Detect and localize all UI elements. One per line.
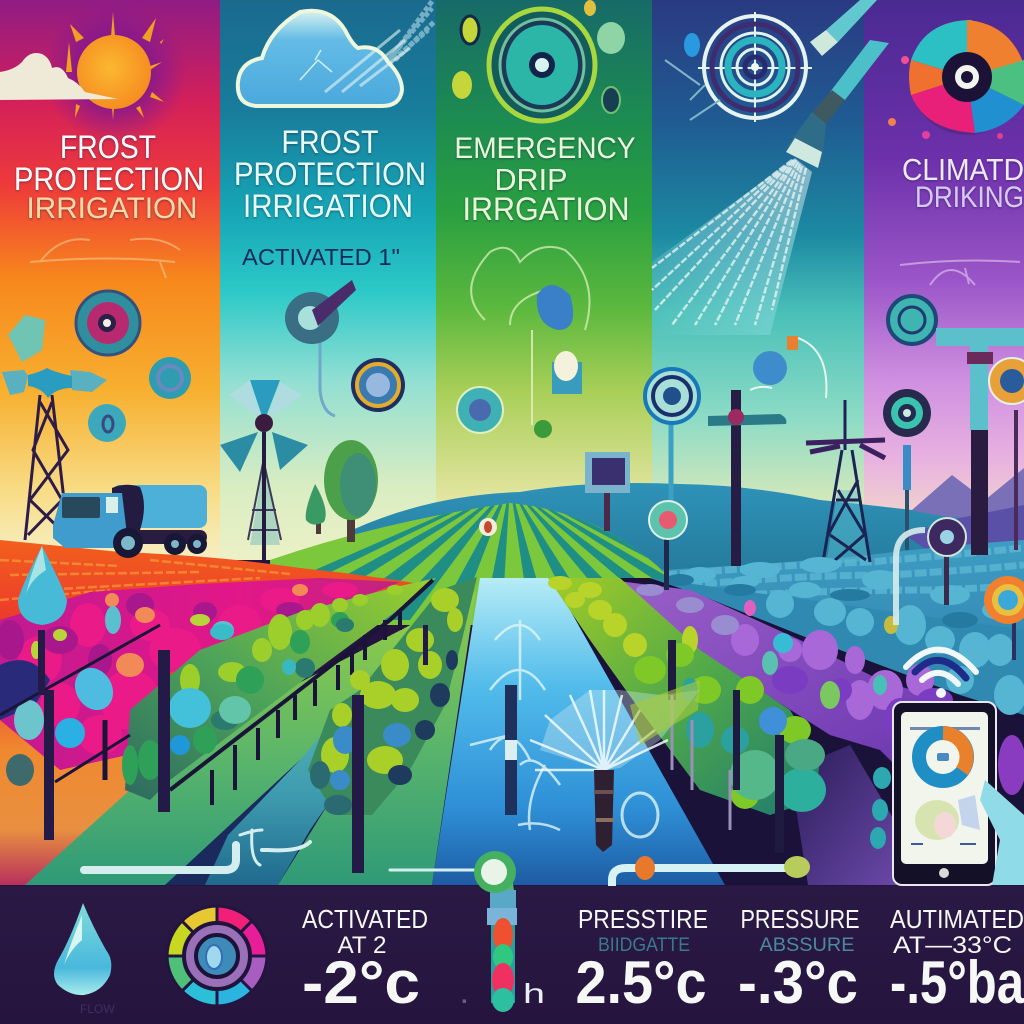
icon: sprinkler post on path <box>505 685 517 815</box>
icon: green ring and traffic-light gauge <box>474 851 517 1012</box>
heading: frost protection irrigation, column 2 <box>234 124 426 224</box>
icon: white blob on blue mesh <box>552 351 582 394</box>
icon: white pipe left <box>84 830 480 870</box>
panel: frost protection column background <box>0 0 220 560</box>
icon: valve column 2 <box>285 280 356 416</box>
stat fragments beside gauge: . <box>461 982 468 1009</box>
caption: flow: FLOW <box>80 1002 115 1016</box>
stat: activated at 2, minus 2 degrees: -2°c <box>302 949 420 1016</box>
icon: leaf gem column 1 <box>8 315 45 362</box>
heading: frost protection irrigation, column 1 <box>14 129 204 225</box>
stat: pressure minus .3: PRESSURE <box>740 904 860 934</box>
icon: smartphone with dashboard <box>893 702 996 885</box>
stat: automated at minus 33, minus .5 bar <box>890 904 1024 1016</box>
icon: segmented colour wheel <box>167 906 267 1006</box>
striped green field <box>270 503 664 625</box>
panel: frost protection irrigation column background <box>220 0 436 560</box>
icon: blue spiral dial column 4 <box>645 369 699 510</box>
ground: green strip 2 <box>278 590 476 885</box>
purple foreground ridge <box>905 505 1024 560</box>
icon: spiral dial column 5 upper <box>888 296 936 344</box>
thin pipe line <box>531 330 533 425</box>
heading: emergency drip irrigation: IRRGATION <box>462 191 630 227</box>
heading: frost protection irrigation, column 1: PROTECTION <box>14 161 204 197</box>
stat: pressure 2.5 <box>576 904 708 1016</box>
ground: right dark soil <box>552 578 1024 885</box>
ground: left soil wedge <box>0 660 300 885</box>
icon: control box <box>585 452 630 531</box>
heading: emergency drip irrigation: DRIP <box>494 162 568 197</box>
ground: dark furrow <box>165 760 335 885</box>
ground: green strip 1 <box>25 620 420 885</box>
icon: cross-arm pole <box>708 390 786 566</box>
stat: pressure minus .3: ABSSURE <box>760 935 854 956</box>
thin curved line <box>750 338 826 398</box>
heading: frost protection irrigation, column 1: IRRIGATION <box>26 192 198 225</box>
icon: white pipe right with balls <box>612 856 810 886</box>
icon: ring dial on field <box>649 501 687 590</box>
heading: emergency drip irrigation: EMERGENCY <box>454 132 636 165</box>
icon: emergency gauge dial <box>452 0 625 121</box>
icon: orange ring dial column 5 <box>989 358 1024 404</box>
faded sketch below column 1 heading <box>30 239 180 278</box>
icon: blue ball <box>753 351 787 385</box>
icon: T pipe column 5 <box>936 328 1024 555</box>
icon: wifi signal <box>906 650 976 698</box>
vineyard: green row near path <box>308 577 477 873</box>
icon: purple sensor dial column 1 <box>76 291 140 355</box>
leaf outlines under heading <box>471 247 590 330</box>
icon: orange small marker <box>787 336 798 350</box>
vineyard: fence rails <box>0 580 433 805</box>
heading: frost protection irrigation, column 2: FROST <box>282 124 378 160</box>
stat: activated at 2, minus 2 degrees: AT 2 <box>338 932 386 959</box>
icon: blue water capsule <box>537 285 573 330</box>
heading: frost protection irrigation, column 2: IRRIGATION <box>243 188 413 224</box>
heading: emergency drip irrigation <box>454 132 636 227</box>
icon: sprinkler with spray <box>530 680 700 852</box>
stat: pressure 2.5: BIIDGATTE <box>598 935 690 956</box>
ground: purple soil <box>790 745 900 885</box>
heading: frost protection irrigation, column 1: FROST <box>60 129 156 165</box>
icon: sun with cloud <box>0 0 187 144</box>
stat fragments beside gauge: h <box>523 978 545 1009</box>
red orange foreground field <box>0 540 420 700</box>
panel: climate driven column background <box>864 0 1024 560</box>
stat: activated at 2, minus 2 degrees: ACTIVATED <box>302 904 428 934</box>
label: activated 1: ACTIVATED 1" <box>242 244 400 270</box>
icon: lattice tower column 4 <box>806 400 885 568</box>
icon: green ball <box>534 420 552 438</box>
heading: frost protection irrigation, column 2: PROTECTION <box>234 156 426 192</box>
stat: activated at 2, minus 2 degrees <box>302 904 428 1016</box>
icon: concentric target <box>665 12 812 122</box>
icon: yellow ring dial column 2 <box>351 358 405 412</box>
teal fingers beside phone <box>870 767 891 849</box>
icon: teal dial column 3 <box>457 387 503 433</box>
background hills <box>352 483 1024 620</box>
icon: colourful pie chart <box>888 19 1024 139</box>
icon: small teal dial column 1 <box>88 404 126 442</box>
vineyard: pink row <box>0 578 400 786</box>
distant mountains <box>900 468 1024 560</box>
icon: small field marker on green field <box>479 518 497 536</box>
vineyard: green row centre left <box>122 578 436 800</box>
vineyard: green row right <box>548 576 826 853</box>
icon: tanker truck <box>53 485 207 558</box>
icon: orange spiral dial on field <box>984 576 1024 660</box>
faded sketch below column 5 heading <box>900 261 1020 285</box>
icon: teal dial column 1 <box>149 357 191 399</box>
blue right field <box>660 540 1024 700</box>
stat: pressure minus .3 <box>738 904 860 1016</box>
icon: hand holding phone <box>980 780 1024 885</box>
icon: dark purple dial on field <box>928 518 966 605</box>
icon: cloud with spray <box>238 0 434 106</box>
icon: small tree <box>306 484 326 534</box>
panel: sprinkler column background <box>652 0 864 560</box>
vineyard: fence posts <box>38 630 170 840</box>
stat: automated at minus 33, minus .5 bar: AT—33°C <box>893 932 1012 959</box>
icon: water drop on field <box>18 546 67 625</box>
ground: teal strip <box>205 580 475 885</box>
vineyard: purple row right <box>610 580 960 775</box>
bottom band <box>0 886 1024 1024</box>
panel: emergency drip column background <box>436 0 652 560</box>
stat fragments beside gauge <box>461 978 545 1009</box>
path: pale irrigation shapes on central path <box>470 620 658 837</box>
icon: bottom water drop <box>54 903 111 995</box>
icon: hose nozzle with water spray <box>652 0 889 335</box>
leaf: purple swirl right of phone <box>998 735 1024 795</box>
stat: pressure 2.5: PRESSTIRE <box>578 904 708 934</box>
icon: tower with pipe head column 1 <box>2 368 107 540</box>
ground: central blue path <box>432 578 725 885</box>
icon: dark ring dial column 5 <box>883 389 931 550</box>
icon: large tree <box>324 440 378 542</box>
stat: pressure 2.5: 2.5°c <box>576 949 706 1016</box>
stat: pressure minus .3: -.3°c <box>738 949 858 1016</box>
heading: climate driving <box>902 152 1024 214</box>
icon: windmill <box>220 380 308 560</box>
vineyard: blue blob row right <box>650 530 1024 715</box>
